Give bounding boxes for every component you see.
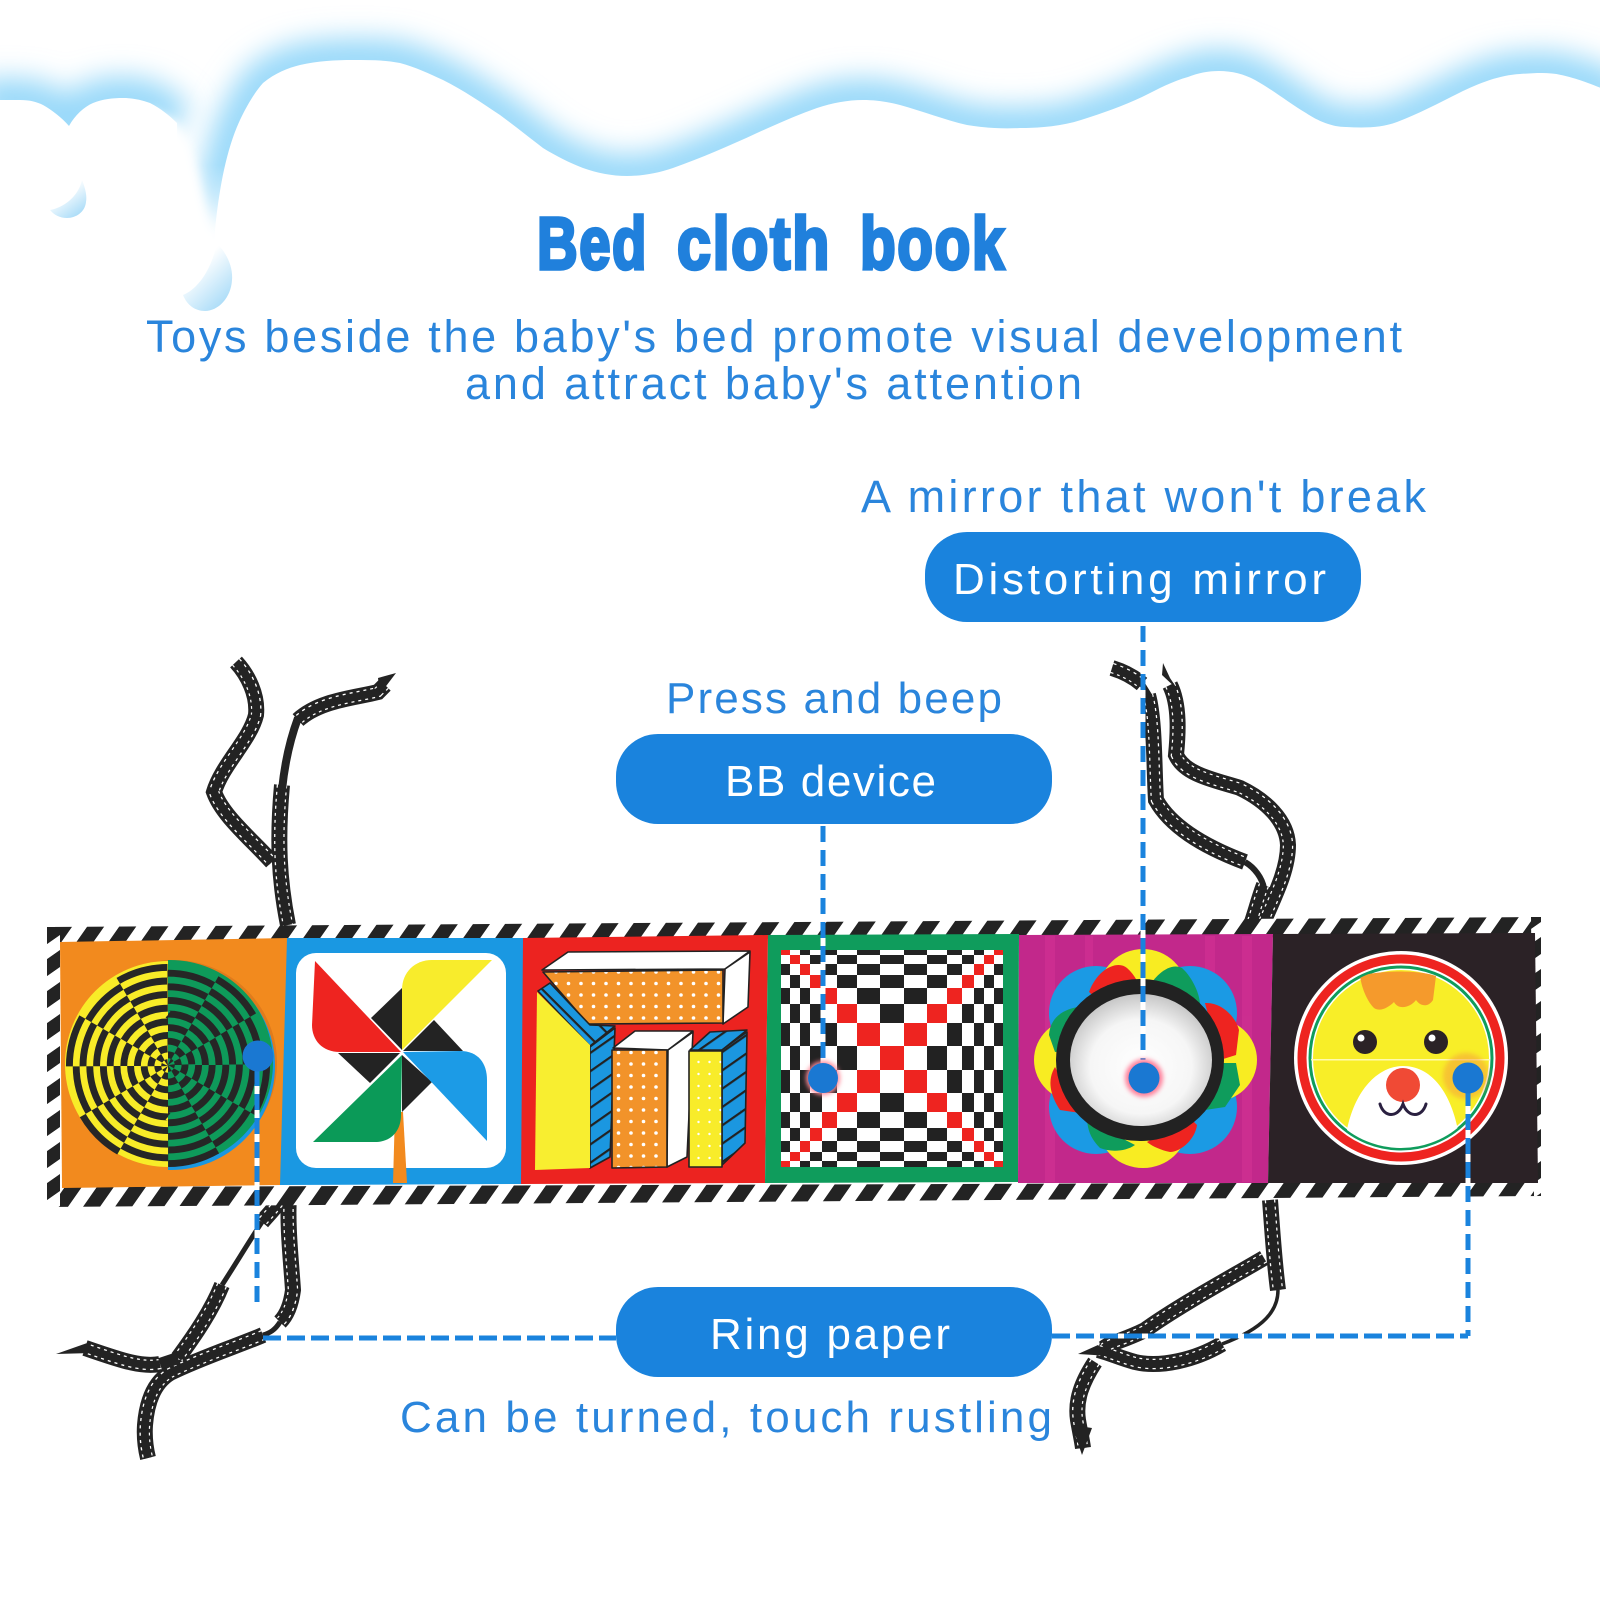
connector: distorting mirror <box>1140 626 1146 1060</box>
pill: Distorting mirror <box>925 532 1361 622</box>
checkerboard <box>781 950 1003 1167</box>
marker dot: right ring paper <box>1452 1062 1484 1094</box>
pill: Distorting mirror: Distorting mirror <box>953 555 1326 604</box>
pill: BB device: BB device <box>725 757 936 806</box>
panel 3: red with 3D blocks <box>521 935 768 1184</box>
disc <box>65 960 277 1170</box>
connector: BB device <box>820 826 826 1065</box>
marker dot: BB device <box>806 1061 840 1095</box>
panel 6: dark with yellow bear face <box>1268 933 1538 1183</box>
caption: ring paper note: Can be turned, touch rustling <box>400 1393 1052 1442</box>
subtitle <box>146 311 1402 409</box>
panel 5: magenta with flower mirror <box>1018 934 1273 1183</box>
title: book <box>860 202 1006 285</box>
connector: ring paper right <box>1052 1090 1468 1336</box>
striped book border <box>47 917 1541 1207</box>
title: cloth <box>677 202 831 285</box>
ribbon ties: bottom right <box>1072 1200 1278 1455</box>
bear face <box>1294 951 1508 1165</box>
pill: Ring paper: Ring paper <box>710 1310 950 1359</box>
subtitle: and attract baby's attention <box>465 358 1082 409</box>
caption: mirror note: A mirror that won't break <box>861 471 1426 522</box>
pill: BB device <box>616 734 1052 824</box>
mirror <box>1056 979 1224 1141</box>
flower petals <box>1034 949 1257 1168</box>
pill: Ring paper <box>616 1287 1052 1377</box>
connector: ring paper left <box>257 1070 616 1338</box>
ribbon ties: top left <box>214 662 396 925</box>
ribbon ties: top right <box>1112 663 1288 925</box>
marker dot: left ring paper <box>242 1040 274 1072</box>
caption: press and beep: Press and beep <box>666 674 1002 723</box>
panel 1: orange with spinning disc <box>60 938 288 1188</box>
title: Bed <box>537 202 648 285</box>
pinwheel <box>312 960 492 1183</box>
panel 2: blue with pinwheel <box>280 938 526 1185</box>
title <box>537 202 1006 285</box>
subtitle: Toys beside the baby's bed promote visual development <box>146 311 1402 362</box>
ribbon ties: bottom left <box>56 1195 293 1458</box>
wavy blue header background <box>0 60 1600 500</box>
panel 4: green with warped checkerboard <box>765 934 1019 1183</box>
marker dot: mirror <box>1125 1059 1163 1097</box>
